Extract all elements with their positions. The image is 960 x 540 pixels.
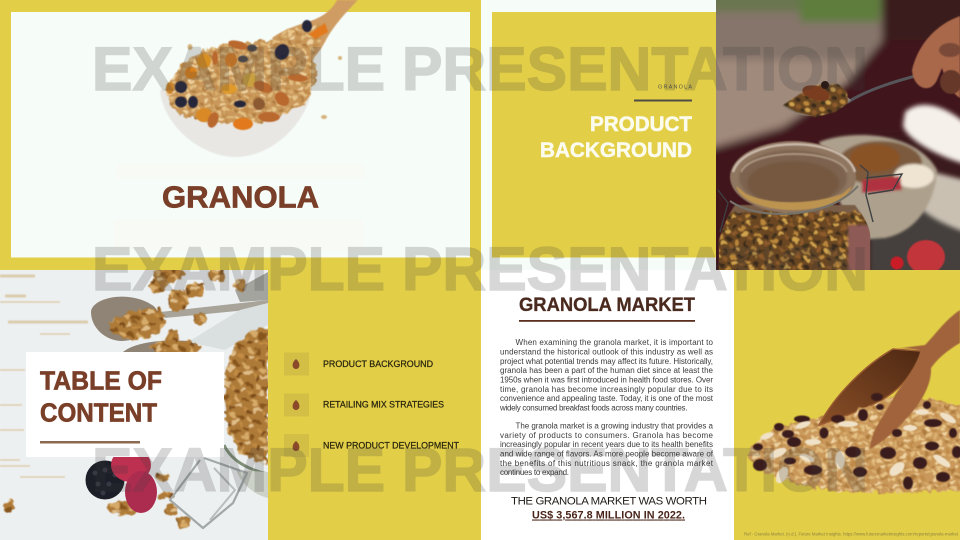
hand [912, 16, 960, 98]
text block: paragraph two: continues to expand. [500, 468, 569, 477]
glass jar with granola [715, 141, 902, 275]
text block: paragraph one: time, granola has become increasingly popular due to its [500, 385, 713, 394]
raisins [175, 20, 312, 108]
text block: paragraph one: convenience and appealing taste. Today, it is one of the most [500, 394, 714, 403]
item 1: PRODUCT BACKGROUND [323, 359, 433, 369]
text block: paragraph two: increasingly popular in recent years due to its health benefits [500, 440, 713, 449]
heading: table of content: CONTENT [40, 398, 157, 428]
callout: market value: THE GRANOLA MARKET WAS WORTH [511, 496, 707, 508]
heading: product background: PRODUCT [590, 113, 692, 136]
spoon bowl and handle [848, 75, 914, 104]
list: contents [284, 352, 459, 457]
watermark: top: EXAMPLE PRESENTATION [92, 35, 868, 103]
almonds [206, 39, 308, 129]
callout: market value [511, 496, 707, 522]
item 3: NEW PRODUCT DEVELOPMENT [323, 440, 459, 450]
text block: paragraph one: understand the historical outlook of this industry as well as [500, 348, 713, 356]
panel: granola cover slide [0, 0, 481, 270]
berries [86, 460, 124, 500]
text block: paragraph one [499, 338, 714, 412]
jar of granola [224, 328, 268, 465]
spoon [91, 297, 157, 341]
icon: wooden scoop [819, 310, 960, 449]
item 2: RETAILING MIX STRATEGIES [323, 400, 444, 410]
granola clusters [3, 267, 246, 528]
reference note: Ref - Granola Market. (n.d.). Future Market Insights. https://www.futuremarketinsights.com/reports/granola-market [744, 532, 959, 536]
text block: paragraph two: variety of products to consumers. Granola has become [500, 431, 714, 440]
almonds [759, 409, 958, 485]
photo: granola jar, spoon and berries on white wood [0, 267, 268, 540]
panel: table of content slide [0, 267, 481, 540]
heading: granola market: GRANOLA MARKET [519, 294, 695, 316]
divider: heading rule [519, 320, 695, 322]
photo: spoon of granola above a jar [706, 0, 960, 275]
text block: paragraph two: the benefits of this nutritious snack, the granola market [500, 459, 714, 468]
label: GRANOLA: GRANOLA [658, 84, 692, 90]
text block: paragraph one: granola has been a part of the human diet since at least the [500, 366, 714, 375]
text block: paragraph one: widely consumed breakfast foods across many countries. [499, 404, 688, 412]
heading: product background [540, 113, 692, 162]
card: table of content [26, 352, 224, 457]
item 2 [284, 394, 444, 416]
apricots [166, 23, 328, 130]
divider: card rule [40, 441, 140, 444]
wood grain [0, 276, 88, 477]
text block: paragraph two: The granola market is a growing industry that provides a [516, 422, 714, 430]
callout: market value: US$ 3,567.8 MILLION IN 2022. [532, 510, 685, 522]
watermark: middle: EXAMPLE PRESENTATION [92, 235, 868, 303]
strawberries [890, 240, 945, 274]
clasp [170, 458, 247, 528]
photo: pile of granola [748, 397, 960, 493]
blurred bowl behind jar [819, 135, 937, 240]
watermark: bottom: EXAMPLE PRESENTATION [92, 436, 868, 504]
title: GRANOLA: GRANOLA [162, 180, 319, 214]
text block: paragraph two [500, 422, 714, 477]
panel: granola market slide [481, 270, 734, 540]
dark plate and table [870, 210, 960, 270]
raisins [753, 393, 960, 490]
heading: table of content: TABLE OF [40, 366, 162, 396]
item 3 [284, 434, 459, 457]
panel: product background slide [481, 0, 717, 270]
blurred white napkin [903, 105, 960, 165]
text block: paragraph one: project what potential trends may affect its future. Historically, [500, 357, 713, 366]
text block: paragraph one: 1950s when it was first introduced in health food stores. Over [500, 376, 713, 384]
heading: table of content [40, 366, 162, 428]
text block: paragraph one: When examining the granola market, it is important to [516, 338, 714, 347]
granola on spoon [783, 84, 848, 117]
panel: granola pile photo [734, 270, 960, 540]
item 1 [284, 352, 433, 376]
icon: bowl of granola with wooden spoon [160, 0, 358, 157]
divider: heading rule [634, 100, 692, 102]
heading: product background: BACKGROUND [540, 139, 692, 162]
text block: paragraph two: and wide range of flavors. As more people become aware of [500, 450, 714, 458]
